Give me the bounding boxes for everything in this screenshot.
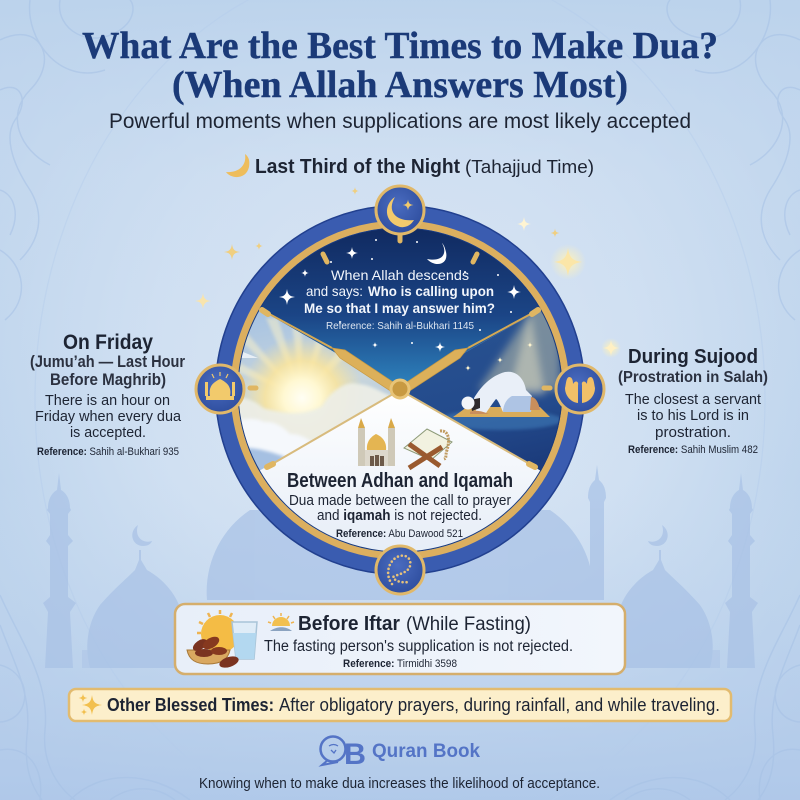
text: on Friday: On Friday <box>63 331 153 354</box>
icon: crescent <box>226 154 249 177</box>
text: during sujood: is to his Lord is in <box>637 407 749 424</box>
icon: sparkles <box>78 694 102 716</box>
text: night sector: Who is calling upon <box>368 283 494 299</box>
text: night sector: Me so that I may answer him? <box>304 300 495 316</box>
text: during sujood: prostration. <box>655 424 731 441</box>
icon: mosque and Quran <box>358 418 452 468</box>
icon: moon <box>427 243 446 264</box>
mosque <box>358 418 395 466</box>
panel: sunrise sector <box>240 310 391 470</box>
text: night sector: When Allah descends <box>331 267 469 283</box>
panel: adhan sector background <box>260 396 540 552</box>
gold inner ring <box>234 224 566 556</box>
logo mark: B <box>344 738 366 771</box>
title <box>82 25 718 106</box>
text: between adhan and iqamah: Reference: Abu Dawood 521 <box>336 528 463 540</box>
dial wheel <box>216 206 584 600</box>
heading: last third of the night: Last Third of the Night <box>255 156 460 178</box>
text: on Friday <box>30 331 185 458</box>
text: on Friday: (Jumu’ah — Last Hour <box>30 352 185 371</box>
badge: crescent and star <box>376 186 424 234</box>
text: between adhan and iqamah: Dua made between the call to prayer <box>289 492 511 509</box>
logo: Quran Book <box>320 736 480 771</box>
text: between adhan and iqamah <box>287 470 513 540</box>
text: during sujood: During Sujood <box>628 346 758 368</box>
text: during sujood: Reference: Sahih Muslim 482 <box>628 444 758 456</box>
panel: before iftar <box>175 604 625 674</box>
panel: other blessed times: Other Blessed Times: <box>107 695 274 715</box>
panel: night sector <box>259 228 541 390</box>
text: night sector: Reference: Sahih al-Bukhari 1145 <box>326 320 474 332</box>
praying figure <box>462 372 540 414</box>
text: on Friday: Reference: Sahih al-Bukhari 935 <box>37 446 179 458</box>
title: (When Allah Answers Most) <box>172 64 628 106</box>
decorative sparkles <box>195 187 621 358</box>
text: on Friday: There is an hour on <box>45 392 170 409</box>
icon: dates, sun and water <box>187 610 257 670</box>
mosque silhouette <box>43 465 758 668</box>
text: on Friday: Friday when every dua <box>35 408 182 425</box>
text: on Friday: Before Maghrib) <box>50 370 166 389</box>
icon: small sunset <box>268 613 294 631</box>
badge: raised hands <box>556 365 604 413</box>
logo mark <box>320 736 366 771</box>
text: on Friday: is accepted. <box>70 424 146 441</box>
upper cloud band <box>238 382 390 442</box>
text: during sujood <box>618 346 768 456</box>
panel: other blessed times: After obligatory prayers, during rainfall, and while traveling. <box>279 695 720 715</box>
clock hands <box>250 235 550 467</box>
badge: mosque <box>196 365 244 413</box>
text: night sector: and says: <box>306 283 363 299</box>
panel: before iftar: (While Fasting) <box>406 614 531 635</box>
subtitle: Powerful moments when supplications are most likely accepted <box>109 110 691 133</box>
text: between adhan and iqamah: Between Adhan and Iqamah <box>287 470 513 492</box>
Quran on stand <box>404 429 452 468</box>
heading: last third of the night: (Tahajjud Time) <box>465 157 594 177</box>
text: during sujood: The closest a servant <box>625 391 762 408</box>
panel: before iftar: The fasting person's supplication is not rejected. <box>264 638 573 655</box>
outer blue ring <box>223 213 577 567</box>
panel: sujood sector <box>409 310 562 471</box>
title: What Are the Best Times to Make Dua? <box>82 25 718 67</box>
panel: other blessed times <box>69 689 731 721</box>
panel: before iftar: Before Iftar <box>298 613 400 635</box>
panel: before iftar: Reference: Tirmidhi 3598 <box>343 658 457 670</box>
badge: prayer beads <box>376 546 424 594</box>
text: during sujood: (Prostration in Salah) <box>618 369 768 386</box>
text: night sector <box>304 267 495 332</box>
prayer mat <box>453 407 550 417</box>
text: between adhan and iqamah: and iqamah is not rejected. <box>317 507 482 524</box>
lower cloud <box>242 418 310 470</box>
logo: Quran Book: Quran Book <box>372 741 480 762</box>
heading: last third of the night <box>226 154 594 178</box>
footer note: Knowing when to make dua increases the likelihood of acceptance. <box>199 776 600 792</box>
